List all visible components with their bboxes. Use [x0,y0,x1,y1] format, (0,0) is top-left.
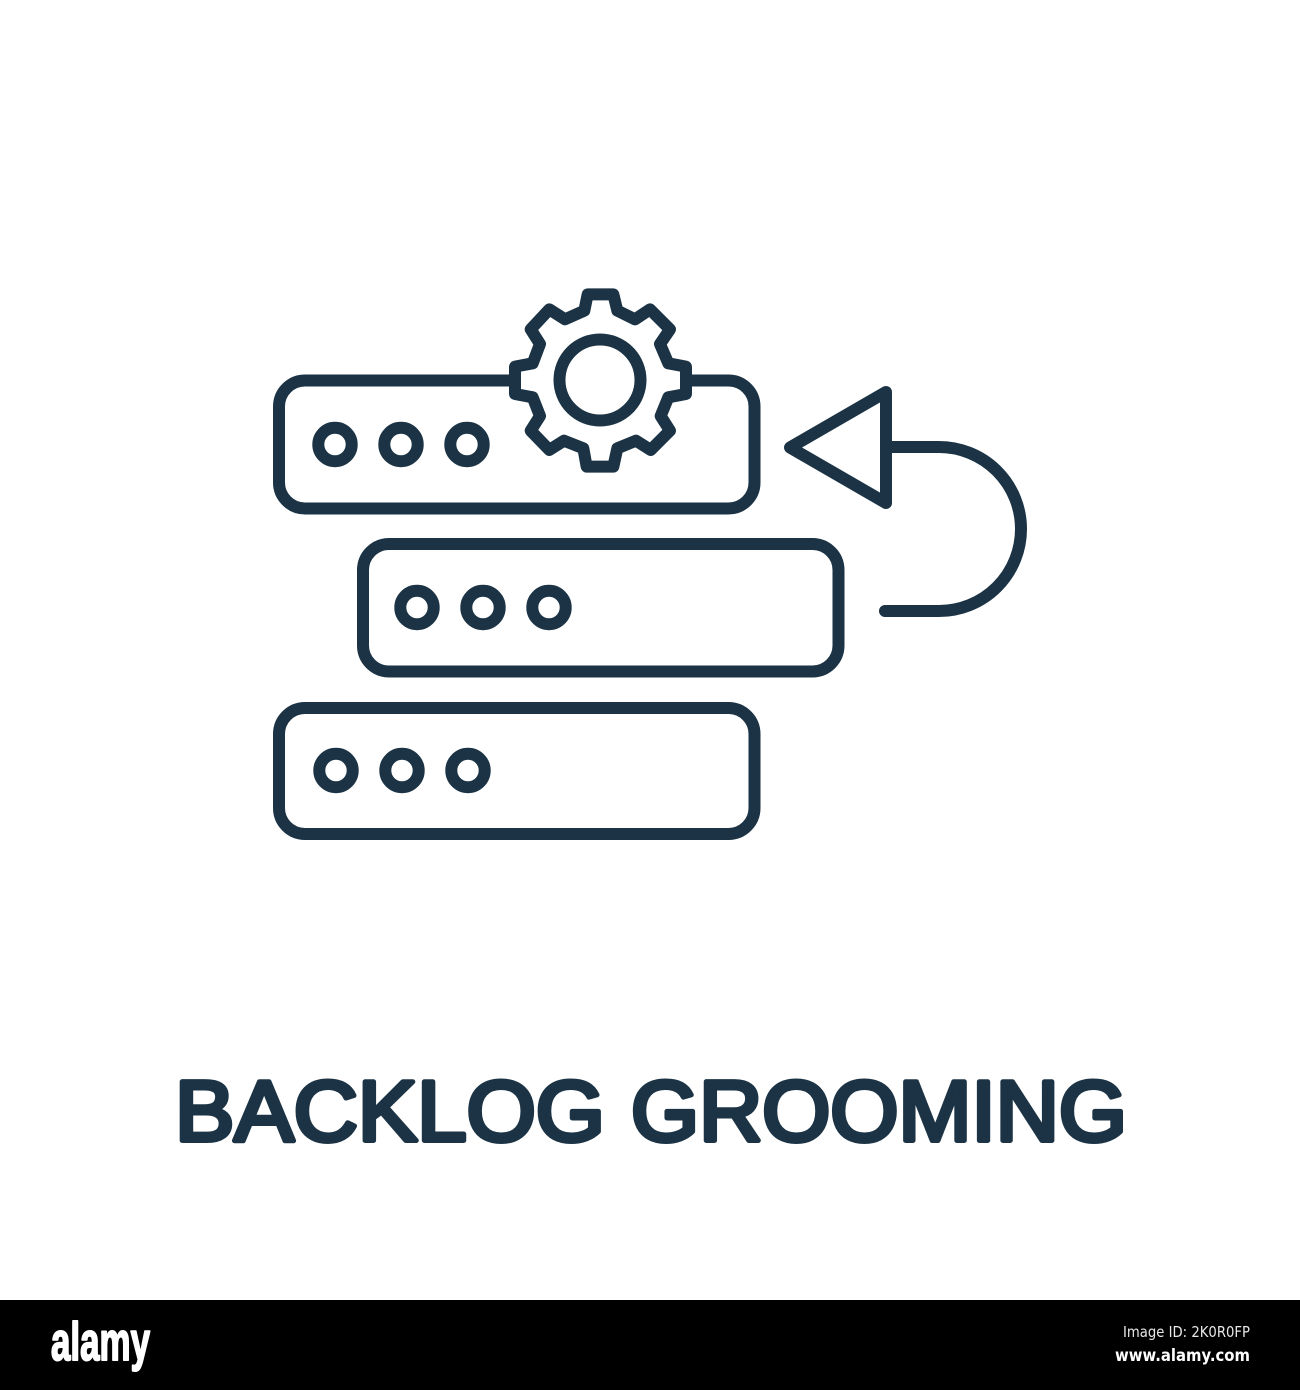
title: BACKLOG [175,1064,605,1160]
arrow: reprioritise item upward [790,392,1021,611]
middle backlog row [363,544,838,672]
title: GROOMING [631,1064,1127,1160]
footer logo: alamy [51,1312,150,1372]
top backlog row [279,380,754,508]
image id: Image ID: 2K0R0FP [1123,1323,1250,1341]
footer bar [0,1300,1300,1390]
icon: backlog grooming [279,294,1021,834]
title [175,1064,1127,1160]
bottom backlog row [279,708,754,834]
icon: gear [515,294,686,467]
website: www.alamy.com [1115,1346,1250,1366]
